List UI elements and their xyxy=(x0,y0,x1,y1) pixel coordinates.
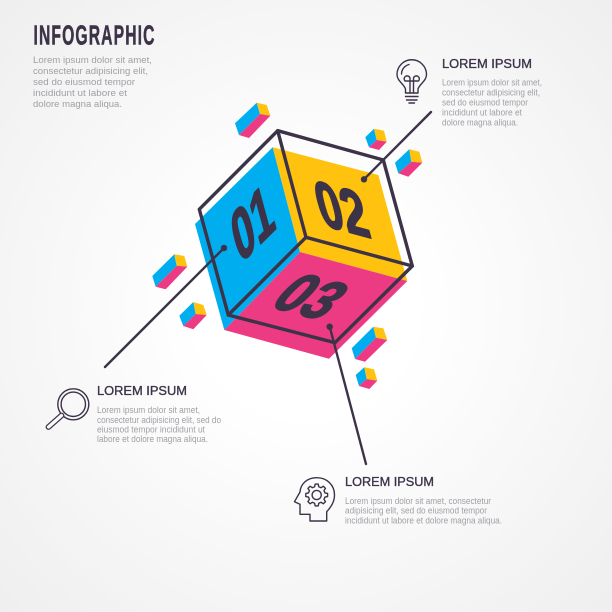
text block: 02: Lorem ipsum dolor sit amet, xyxy=(442,78,542,88)
text block: 01: Lorem ipsum dolor sit amet, xyxy=(97,405,200,415)
text block: 01 xyxy=(97,405,221,444)
text block: 02: sed do eiusmod tempor xyxy=(442,98,528,108)
text block: 01: consectetur adipisicing elit, sed do xyxy=(97,415,221,425)
small cube E xyxy=(395,149,422,177)
face: blue 01 xyxy=(195,147,300,330)
icon: head with gear xyxy=(294,478,334,521)
icon: light bulb xyxy=(397,60,426,103)
intro text block: consectetur adipisicing elit, xyxy=(33,66,148,76)
leader line 02 xyxy=(361,112,431,182)
intro text block: incididunt ut labore et xyxy=(33,88,128,98)
face: yellow 02 xyxy=(273,147,407,281)
main cube coloured faces xyxy=(195,147,407,359)
text block: 03: adipisicing elit, sed do eiusmod tempor xyxy=(345,506,487,516)
text block: 02: consectetur adipisicing elit, xyxy=(442,88,540,98)
text block: 02: dolore magna aliqua. xyxy=(442,118,518,128)
small cube F xyxy=(352,327,387,362)
text block: 02 xyxy=(442,78,542,128)
small cube D xyxy=(365,129,387,150)
leader line 03 xyxy=(326,324,366,464)
small cube B xyxy=(152,254,187,289)
intro text block: sed do eiusmod tempor xyxy=(33,77,135,87)
heading: 01: LOREM IPSUM xyxy=(97,383,187,398)
number 02: 02 xyxy=(307,166,377,253)
leader line 01 xyxy=(105,245,227,367)
heading: 03: LOREM IPSUM xyxy=(345,474,434,489)
face: pink 03 xyxy=(224,252,407,359)
icon: magnifier xyxy=(48,389,89,427)
title: INFOGRAPHIC xyxy=(34,19,154,51)
number 01: 01 xyxy=(224,170,281,278)
intro text block: Lorem ipsum dolor sit amet, xyxy=(33,55,152,65)
small cube C xyxy=(179,302,207,329)
text block: 03: Lorem ipsum dolor sit amet, consectetur xyxy=(345,496,491,506)
text block: 01: eiusmod tempor incididunt ut xyxy=(97,424,206,434)
text block: 01: labore et dolore magna aliqua. xyxy=(97,434,208,444)
intro text block xyxy=(33,55,152,109)
intro text block: dolore magna aliqua. xyxy=(33,99,122,109)
text block: 03 xyxy=(345,496,502,526)
text block: 02: incididunt ut labore et xyxy=(442,108,523,118)
number 03: 03 xyxy=(257,263,363,331)
small cube G xyxy=(356,367,377,389)
text block: 03: incididunt ut labore et dolore magna aliqua. xyxy=(345,516,502,526)
wireframe cube xyxy=(199,131,412,343)
small cube A xyxy=(235,103,270,138)
heading: 02: LOREM IPSUM xyxy=(442,56,532,71)
